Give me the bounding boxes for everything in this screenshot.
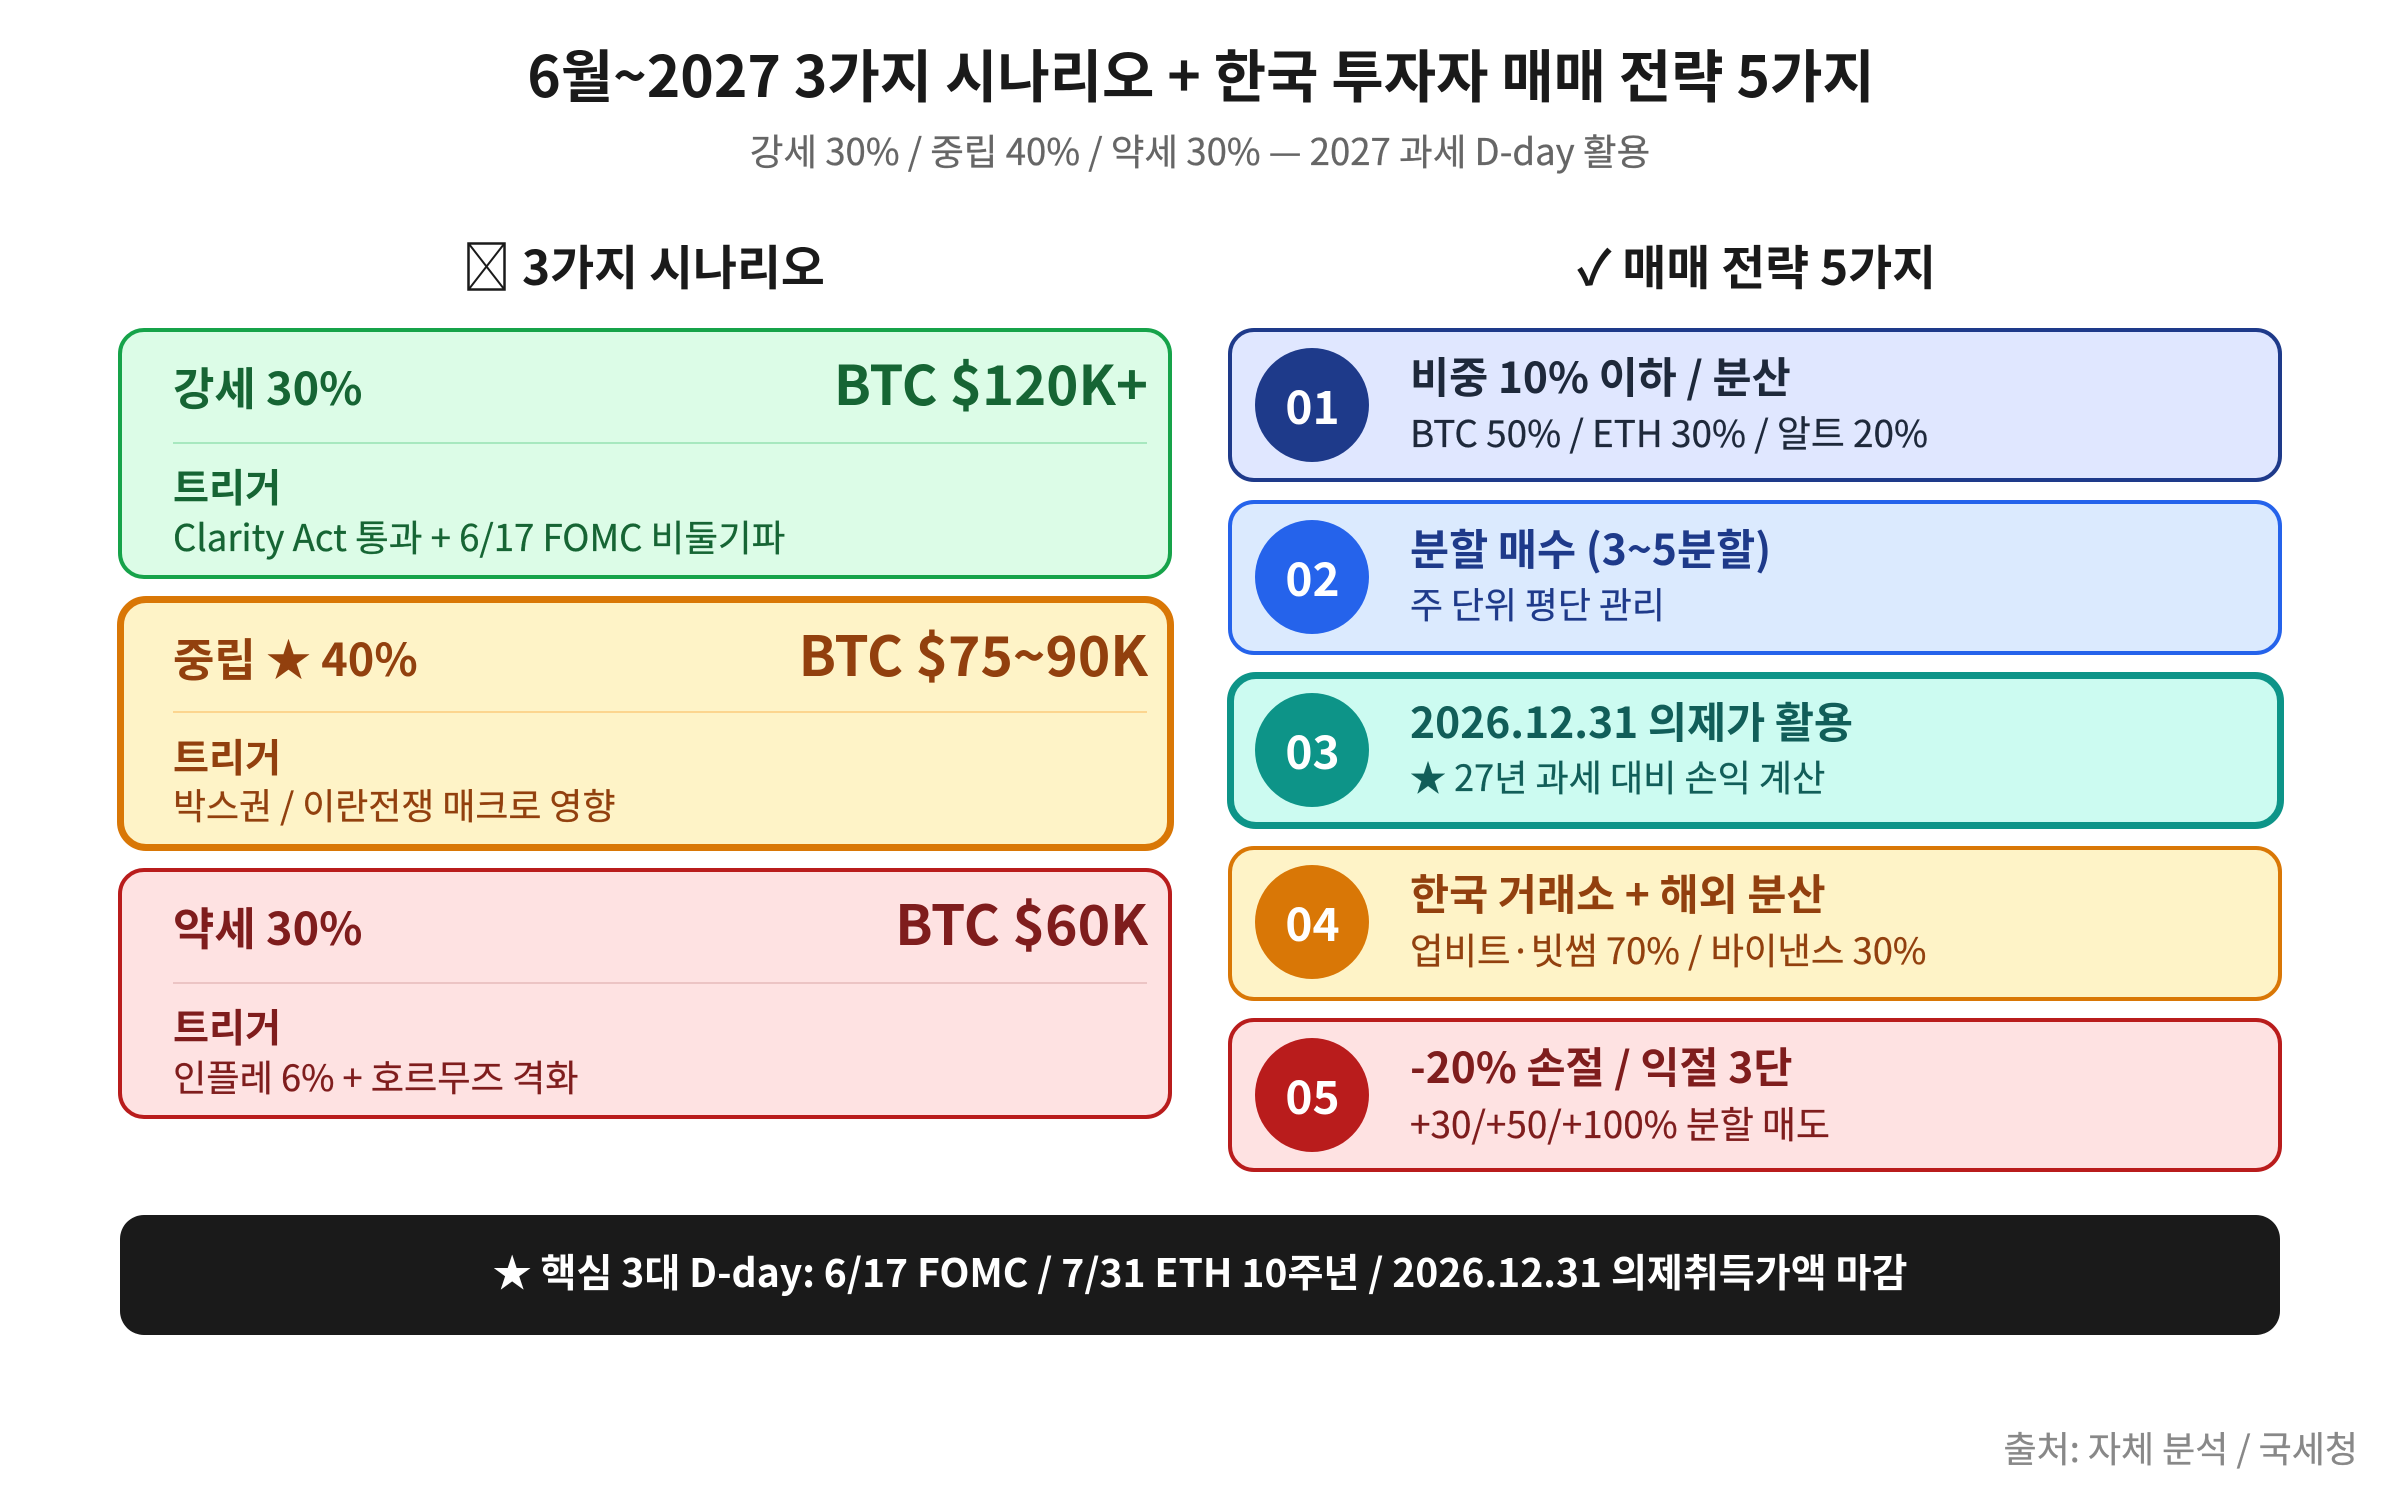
- badge 01: 01: [1285, 372, 1340, 438]
- strategy 03 title: 2026.12.31 의제가 활용: [1410, 690, 1853, 750]
- strategy 04 text: 업비트·빗썸 70% / 바이낸스 30%: [1410, 923, 1926, 975]
- panel: strategy 03: [1226, 672, 2284, 828]
- badge 05: [1255, 1038, 1369, 1152]
- bullish trigger text: Clarity Act 통과 + 6/17 FOMC 비둘기파: [173, 509, 785, 562]
- callout: key D-days: [120, 1215, 2280, 1335]
- neutral trigger heading: 트리거: [173, 728, 281, 784]
- badge 05: 05: [1285, 1062, 1340, 1128]
- badge 02: [1255, 520, 1369, 634]
- neutral label: 중립 ★ 40%: [173, 624, 418, 689]
- bearish price: BTC $60K: [895, 881, 1148, 961]
- subtitle: 강세 30% / 중립 40% / 약세 30% — 2027 과세 D-day 활용: [750, 123, 1650, 176]
- bullish label: 강세 30%: [173, 353, 362, 418]
- heading: scenarios: 3가지 시나리오: [522, 230, 825, 299]
- bearish label: 약세 30%: [173, 893, 362, 958]
- strategy 03 text: ★ 27년 과세 대비 손익 계산: [1410, 750, 1825, 802]
- strategy 01 text: BTC 50% / ETH 30% / 알트 20%: [1410, 404, 1928, 458]
- strategy 05 title: -20% 손절 / 익절 3단: [1410, 1034, 1792, 1096]
- strategy 05 text: +30/+50/+100% 분할 매도: [1410, 1095, 1830, 1149]
- panel: strategy 05: [1228, 1018, 2282, 1172]
- bullish price: BTC $120K+: [834, 342, 1148, 421]
- badge 03: [1255, 693, 1369, 807]
- callout: key D-days: ★ 핵심 3대 D-day: 6/17 FOMC / 7/31 ETH 10주년 / 2026.12.31 의제취득가액 마감: [493, 1243, 1907, 1299]
- neutral price: BTC $75~90K: [799, 612, 1148, 692]
- panel: strategy 02: [1228, 500, 2282, 655]
- bearish trigger text: 인플레 6% + 호르무즈 격화: [173, 1050, 579, 1102]
- badge 04: [1255, 865, 1369, 979]
- badge 03: 03: [1285, 717, 1340, 783]
- neutral trigger text: 박스권 / 이란전쟁 매크로 영향: [173, 778, 615, 830]
- panel: neutral scenario: [116, 596, 1174, 851]
- strategy 04 title: 한국 거래소 + 해외 분산: [1410, 862, 1826, 922]
- strategy 02 title: 분할 매수 (3~5분할): [1410, 516, 1771, 578]
- bearish trigger heading: 트리거: [173, 998, 281, 1054]
- strategy 01 title: 비중 10% 이하 / 분산: [1410, 344, 1791, 406]
- source note: 출처: 자체 분석 / 국세청: [2004, 1421, 2358, 1473]
- panel: bullish scenario: [118, 328, 1172, 579]
- badge 02: 02: [1285, 544, 1340, 610]
- panel: bearish scenario: [118, 868, 1172, 1119]
- heading: strategies: ✓ 매매 전략 5가지: [1577, 230, 1936, 299]
- badge 04: 04: [1285, 889, 1340, 955]
- strategy 02 text: 주 단위 평단 관리: [1410, 577, 1665, 629]
- icon: missing glyph box: [467, 242, 506, 291]
- panel: strategy 04: [1228, 846, 2282, 1000]
- panel: strategy 01: [1228, 328, 2282, 482]
- bullish trigger heading: 트리거: [173, 458, 281, 514]
- title: 6월~2027 3가지 시나리오 + 한국 투자자 매매 전략 5가지: [527, 32, 1875, 114]
- badge 01: [1255, 348, 1369, 462]
